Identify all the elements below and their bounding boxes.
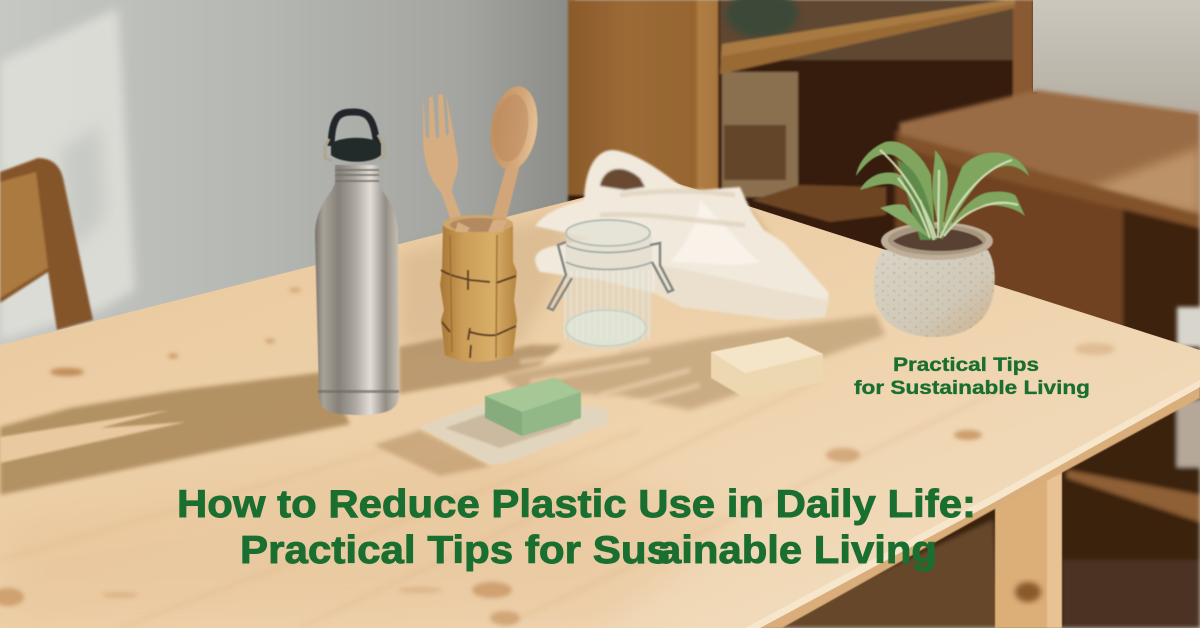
table apron edge xyxy=(755,376,1200,628)
bamboo fork xyxy=(423,94,467,232)
small text: practical tips label: for Sustainable Living xyxy=(854,378,1090,399)
upper right wall xyxy=(1033,0,1200,113)
wooden table top xyxy=(0,178,1200,628)
title xyxy=(177,483,976,572)
table leg xyxy=(995,470,1062,628)
title: ainable Living xyxy=(658,529,937,572)
stainless steel water bottle xyxy=(315,112,399,415)
small text: practical tips label xyxy=(854,355,1090,399)
cloth under green soap xyxy=(419,403,610,465)
jar metal clips xyxy=(548,242,673,310)
background wall xyxy=(0,0,575,350)
small text: practical tips label: Practical Tips xyxy=(893,355,1039,376)
title: Practical Tips for Sus xyxy=(240,529,670,572)
bamboo utensil cup xyxy=(440,215,517,362)
cast shadows on the table xyxy=(0,190,885,495)
floor and lower shelf beneath the table xyxy=(760,307,1200,628)
wooden bench on the right xyxy=(895,90,1200,400)
potted plant xyxy=(856,141,1029,337)
glass jar with clips xyxy=(548,220,673,350)
title: How to Reduce Plastic Use in Daily Life: xyxy=(177,483,976,526)
table knots xyxy=(0,288,1115,625)
wooden chair xyxy=(0,158,93,330)
bamboo spoon xyxy=(485,83,543,232)
cotton tote bag xyxy=(535,150,829,320)
ceramic pot xyxy=(874,222,995,337)
green soap bar xyxy=(485,378,581,436)
cream soap bar xyxy=(711,337,823,398)
bottle cap with loop handle xyxy=(325,112,384,162)
wooden shelving unit xyxy=(568,0,1038,260)
plant leaves xyxy=(856,141,1029,240)
